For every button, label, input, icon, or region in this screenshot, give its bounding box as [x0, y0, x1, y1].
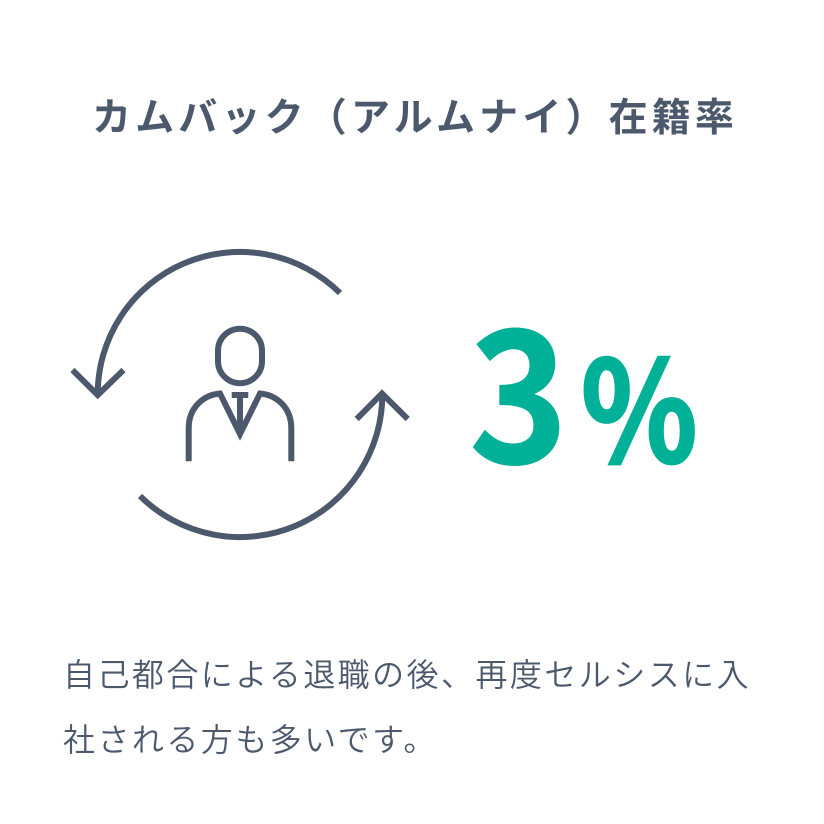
description text: 社される方も多いです。: [63, 722, 438, 758]
icon: person with circular arrows: [70, 248, 410, 540]
icon: lower arrow: [140, 393, 408, 537]
description text: [63, 657, 751, 758]
icon: upper arrow: [72, 252, 340, 396]
description text: 自己都合による退職の後、再度セルシスに入: [63, 657, 751, 693]
icon: person: [189, 329, 291, 461]
title: カムバック（アルムナイ）在籍率: [92, 97, 738, 140]
big number: [469, 310, 697, 490]
